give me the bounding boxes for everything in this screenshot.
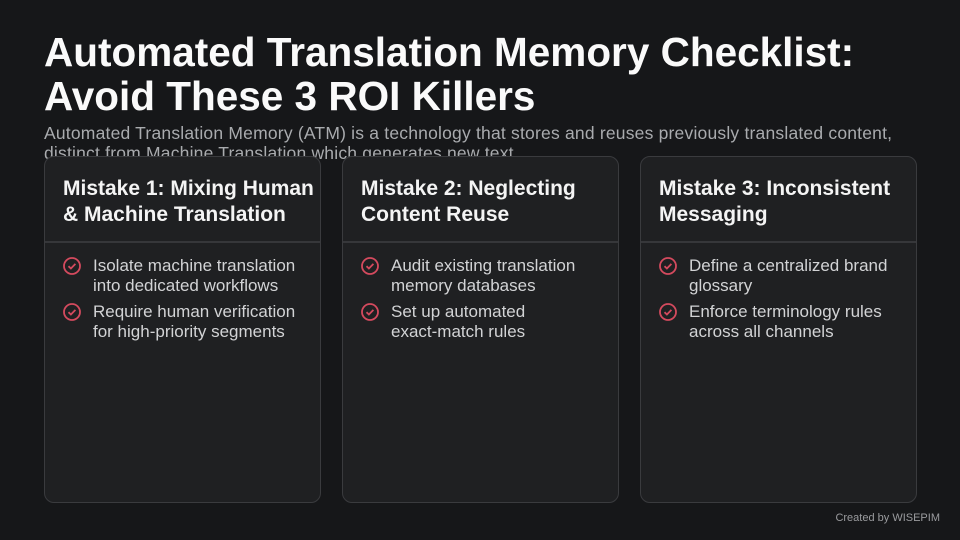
- bullet: exact-match rules: [391, 322, 525, 341]
- subtitle: distinct from Machine Translation which generates new text.: [44, 143, 519, 163]
- heading: Messaging: [659, 203, 768, 226]
- bullet: into dedicated workflows: [93, 276, 278, 295]
- heading: Content Reuse: [361, 203, 509, 226]
- bullet: [659, 302, 882, 341]
- panel: mistake 3: [640, 156, 917, 503]
- bullet: [361, 302, 525, 341]
- bullet: for high-priority segments: [93, 322, 285, 341]
- heading: Mistake 1: Mixing Human: [63, 177, 314, 200]
- bullet: [361, 256, 575, 295]
- list: [659, 256, 887, 341]
- bullet: Enforce terminology rules: [689, 302, 882, 321]
- bullet: [659, 256, 887, 295]
- list: [63, 256, 295, 341]
- heading: Mistake 2: Neglecting: [361, 177, 576, 200]
- subtitle: Automated Translation Memory (ATM) is a technology that stores and reuses previously translated content,: [44, 123, 892, 143]
- heading: & Machine Translation: [63, 203, 286, 226]
- bullet: Set up automated: [391, 302, 525, 321]
- bullet: Require human verification: [93, 302, 295, 321]
- heading: [343, 157, 618, 243]
- panel: mistake 1: [44, 156, 321, 503]
- heading: [641, 157, 916, 243]
- bullet: across all channels: [689, 322, 834, 341]
- subtitle: [44, 123, 892, 163]
- bullet: Audit existing translation: [391, 256, 575, 275]
- panel: mistake 2: [342, 156, 619, 503]
- bullet: Isolate machine translation: [93, 256, 295, 275]
- heading: [45, 157, 320, 243]
- footer credit: Created by WISEPIM: [835, 512, 940, 524]
- bullet: Define a centralized brand: [689, 256, 887, 275]
- list: [361, 256, 575, 341]
- title: Automated Translation Memory Checklist:: [44, 29, 854, 75]
- heading: Mistake 3: Inconsistent: [659, 177, 890, 200]
- bullet: memory databases: [391, 276, 536, 295]
- bullet: [63, 256, 295, 295]
- title: [44, 29, 854, 119]
- bullet: glossary: [689, 276, 752, 295]
- title: Avoid These 3 ROI Killers: [44, 73, 535, 119]
- bullet: [63, 302, 295, 341]
